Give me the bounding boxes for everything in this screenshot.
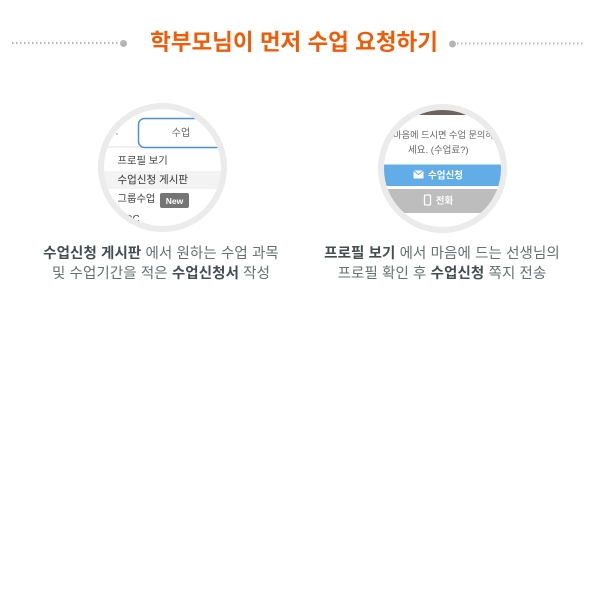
illustration: profile screenshot circle xyxy=(378,104,507,233)
circle ring xyxy=(380,106,504,230)
blue request button xyxy=(384,164,501,186)
illustration: menu screenshot circle: QOC xyxy=(117,214,140,225)
icon: phone xyxy=(424,194,430,204)
right description: 프로필 보기 에서 마음에 드는 선생님의 xyxy=(324,246,560,262)
grey call button xyxy=(388,189,498,213)
illustration: profile screenshot circle: 세요. (수업료?) xyxy=(408,144,468,156)
message text: 마음에 드시면 수업 문의하 xyxy=(393,128,494,140)
highlighted menu row xyxy=(104,171,220,189)
illustration: menu screenshot circle: New xyxy=(166,196,184,206)
illustration: profile screenshot circle: 수업신청 xyxy=(428,169,462,181)
left dotted divider xyxy=(12,40,127,47)
new badge xyxy=(160,193,189,208)
left description xyxy=(43,245,279,282)
right dotted divider xyxy=(449,40,582,48)
tab outline xyxy=(138,118,218,148)
title: 학부모님이 먼저 수업 요청하기 xyxy=(150,30,438,55)
circle ring xyxy=(101,106,224,229)
illustration: menu screenshot circle: 수업신청 게시판 xyxy=(118,173,188,186)
illustration: menu screenshot circle xyxy=(98,103,227,232)
right description: 프로필 확인 후 수업신청 쪽지 전송 xyxy=(338,266,546,282)
tab label: 수업 xyxy=(172,126,190,139)
illustration: profile screenshot circle: 전화 xyxy=(435,194,453,206)
left description: 및 수업기간을 적은 수업신청서 작성 xyxy=(52,266,270,282)
icon: envelope xyxy=(413,170,423,178)
menu items: 프로필 보기 xyxy=(118,155,168,167)
illustration: menu screenshot circle: 그룹수업 xyxy=(118,192,155,205)
left description: 수업신청 게시판 에서 원하는 수업 과목 xyxy=(43,246,279,262)
photo strip xyxy=(419,110,466,115)
right description xyxy=(324,245,560,282)
